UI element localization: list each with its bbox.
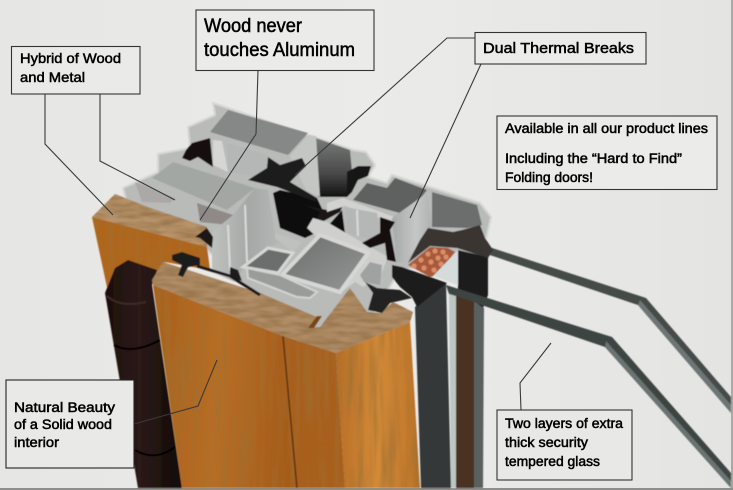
aluminum profile: [123, 103, 491, 330]
upper right gasket: [347, 166, 371, 197]
right dark chamber: [353, 178, 427, 215]
hinge: [105, 260, 182, 488]
rear sash strip: [458, 250, 488, 308]
front glass pane: [446, 285, 731, 488]
clip in wood: [365, 282, 412, 313]
upper dark chamber: [313, 137, 352, 197]
back glass pane: [481, 245, 731, 413]
mid-right gasket: [362, 217, 396, 262]
door frame cross-section: [92, 103, 731, 488]
black corner block: [392, 265, 447, 307]
central walls: [327, 198, 397, 224]
back wood panel: [92, 194, 213, 292]
reflective spacer: [433, 250, 458, 285]
middle pale chamber: [213, 140, 228, 172]
callout: two layers of glass: Two layers of extra: [505, 416, 624, 431]
wood end grain: [152, 262, 413, 353]
leader lines: [45, 38, 551, 424]
thermal break center: [248, 157, 317, 202]
front square chamber: [282, 235, 368, 292]
foam cap: [408, 225, 493, 263]
callout: wood never touches aluminum: touches Aluminum: [204, 40, 355, 61]
glass edge strips: [449, 294, 484, 488]
small pale chamber: [275, 233, 302, 252]
lower left chamber: [152, 162, 255, 210]
tall fin column: [212, 188, 285, 282]
callout: natural beauty: interior: [14, 435, 60, 450]
seal clip: [172, 252, 200, 277]
callout: wood never touches aluminum: [196, 10, 374, 70]
far right chamber: [432, 192, 482, 228]
dark vertical strip: [415, 283, 451, 488]
callout: natural beauty: Natural Beauty: [14, 400, 115, 415]
callout: available in all product lines: Including the “Hard to Find”: [505, 151, 682, 166]
front wood panel: [152, 252, 420, 488]
small dark chamber: [243, 248, 293, 273]
callout: natural beauty: [6, 380, 134, 468]
callout: hybrid of wood and metal: [12, 46, 140, 94]
upper pale fin: [290, 135, 320, 197]
callout: two layers of glass: [497, 410, 632, 480]
copper desiccant beads: [408, 247, 455, 277]
fin right of square: [360, 262, 382, 285]
lower left channel: [135, 182, 175, 203]
callout: hybrid of wood and metal: Hybrid of Wood: [20, 50, 121, 66]
lower channel: [247, 268, 317, 298]
top chamber: [210, 110, 308, 155]
central black void: [273, 190, 325, 238]
callout: hybrid of wood and metal: and Metal: [20, 69, 85, 85]
callout: dual thermal breaks: Dual Thermal Breaks: [483, 40, 634, 57]
right light column: [392, 193, 432, 263]
callout: available in all product lines: [497, 116, 717, 190]
callout: two layers of glass: thick security: [505, 435, 588, 450]
mid-right pale chamber: [345, 207, 380, 243]
callout: available in all product lines: Folding doors!: [505, 170, 593, 185]
callout: wood never touches aluminum: Wood never: [204, 16, 303, 37]
callout: available in all product lines: Available in all our product lines: [505, 121, 708, 136]
left gasket: [182, 138, 213, 167]
profile silhouette: [123, 103, 491, 330]
callout: two layers of glass: tempered glass: [505, 454, 600, 469]
callout: natural beauty: of a Solid wood: [14, 417, 112, 432]
callout: dual thermal breaks: [475, 32, 646, 64]
thermal break black end: [365, 225, 493, 488]
